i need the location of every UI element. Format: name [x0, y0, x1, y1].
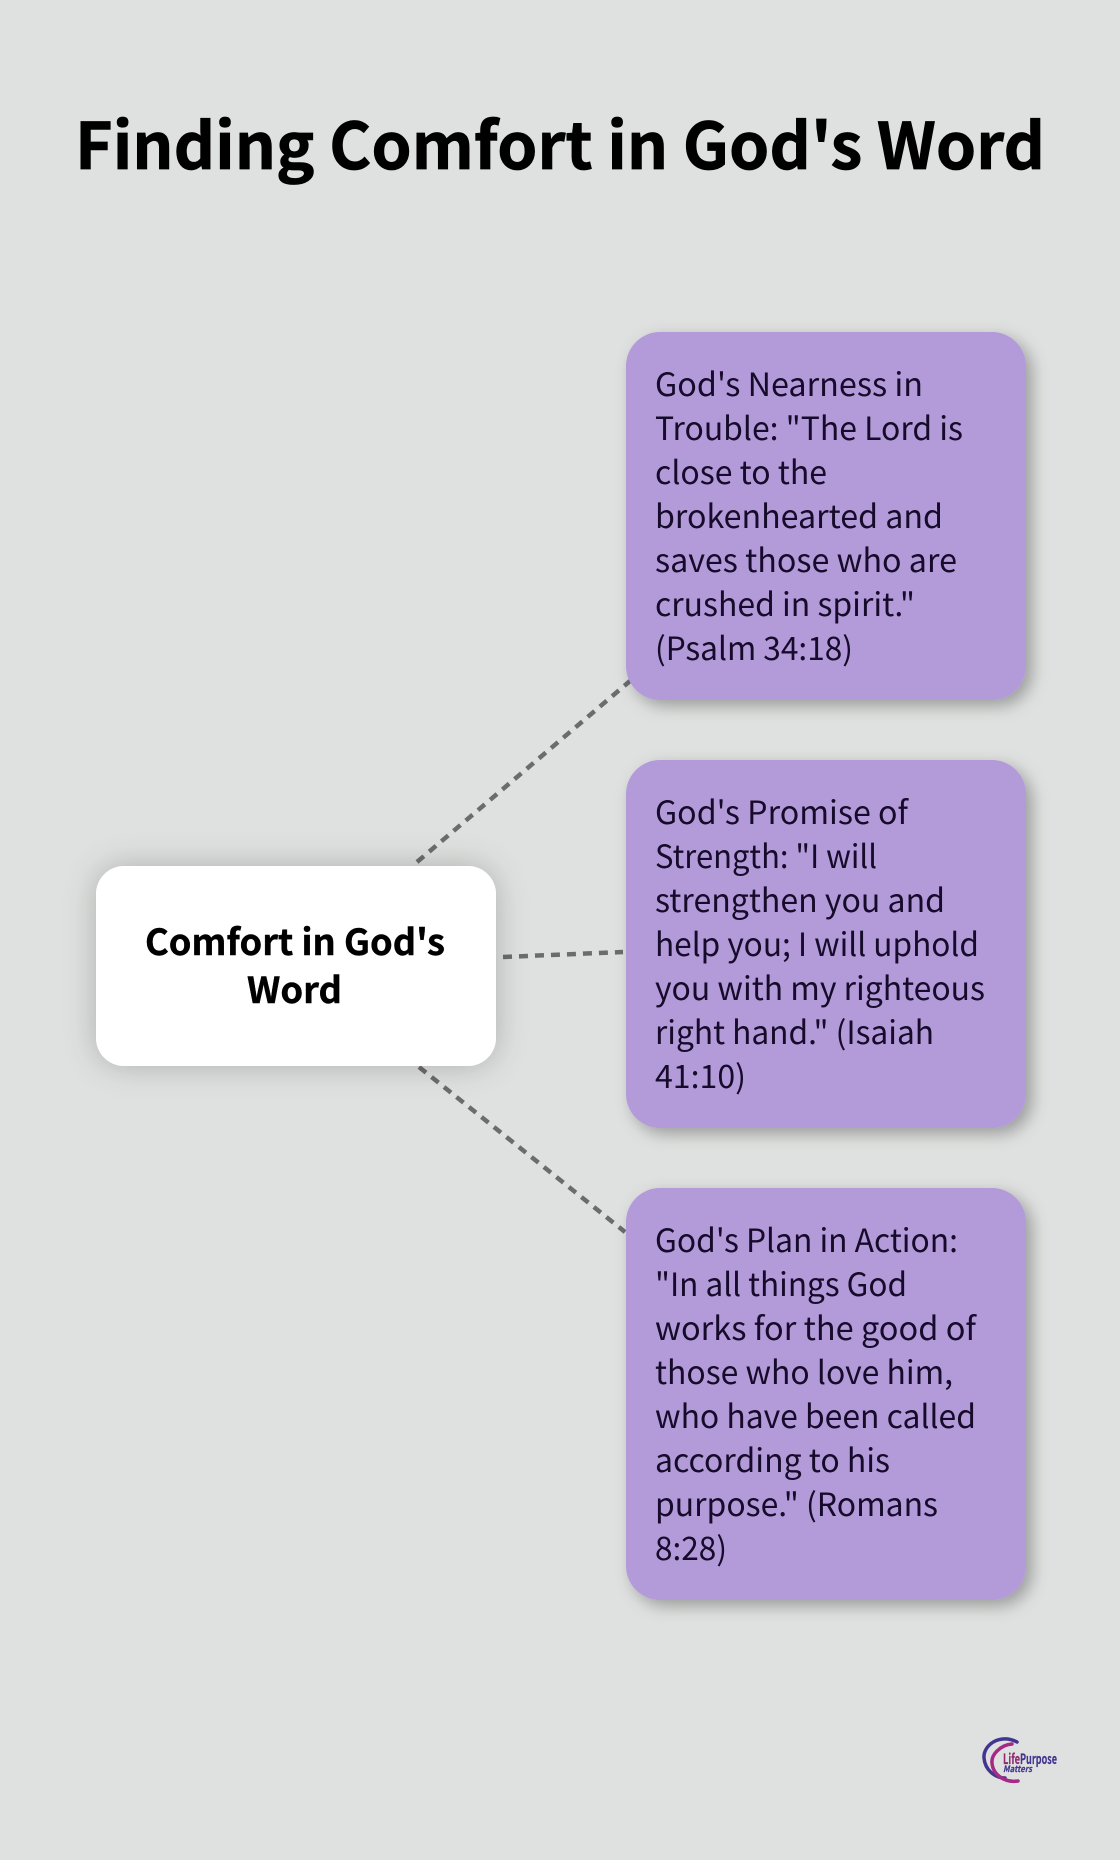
logo icon: arcs	[984, 1739, 1018, 1781]
logo wordmark: Purpose	[1020, 1749, 1057, 1769]
panel: central node	[96, 866, 496, 1066]
logo wordmark: Matters	[1003, 1762, 1033, 1775]
logo: Life Purpose Matters	[984, 1739, 1057, 1781]
central node label: Word	[247, 962, 342, 1014]
card text: Isaiah 41:10: help you; I will uphold	[655, 920, 979, 966]
panel: God's Promise of Strength	[626, 760, 1026, 1128]
logo wordmark: Life	[1003, 1749, 1020, 1769]
card text: Psalm 34:18: saves those who are	[655, 536, 957, 582]
connector: center to second card	[503, 952, 623, 957]
panel: God's Nearness in Trouble	[626, 332, 1026, 700]
connector: center to first card	[417, 681, 630, 862]
card text: Isaiah 41:10: you with my righteous	[655, 964, 985, 1010]
card text: Romans 8:28: those who love him,	[655, 1348, 953, 1394]
card text: Psalm 34:18: brokenhearted and	[655, 492, 943, 538]
card text: Romans 8:28: 8:28)	[655, 1524, 727, 1570]
card text: Romans 8:28: "In all things God	[655, 1260, 907, 1306]
central node label: Comfort in God's	[145, 914, 445, 966]
card text: Isaiah 41:10: God's Promise of	[655, 788, 910, 834]
card text: Isaiah 41:10: right hand." (Isaiah	[655, 1008, 934, 1054]
card text: Romans 8:28: works for the good of	[655, 1304, 978, 1350]
card text: Isaiah 41:10: 41:10)	[655, 1052, 746, 1098]
title: Finding Comfort in God's Word	[75, 96, 1045, 188]
card text: Isaiah 41:10: Strength: "I will	[655, 832, 877, 878]
panel: God's Plan in Action	[626, 1188, 1026, 1600]
connector: center to third card	[419, 1067, 625, 1232]
card text: Romans 8:28: God's Plan in Action:	[655, 1216, 958, 1262]
card text: Isaiah 41:10: strengthen you and	[655, 876, 945, 922]
card text: Psalm 34:18: (Psalm 34:18)	[655, 624, 853, 670]
card text: Psalm 34:18: God's Nearness in	[655, 360, 923, 406]
card text: Psalm 34:18: Trouble: "The Lord is	[655, 404, 963, 450]
card text: Romans 8:28: according to his	[655, 1436, 890, 1482]
card text: Romans 8:28: purpose." (Romans	[655, 1480, 938, 1526]
card text: Romans 8:28: who have been called	[655, 1392, 976, 1438]
card text: Psalm 34:18: crushed in spirit."	[655, 580, 915, 626]
card text: Psalm 34:18: close to the	[655, 448, 827, 494]
